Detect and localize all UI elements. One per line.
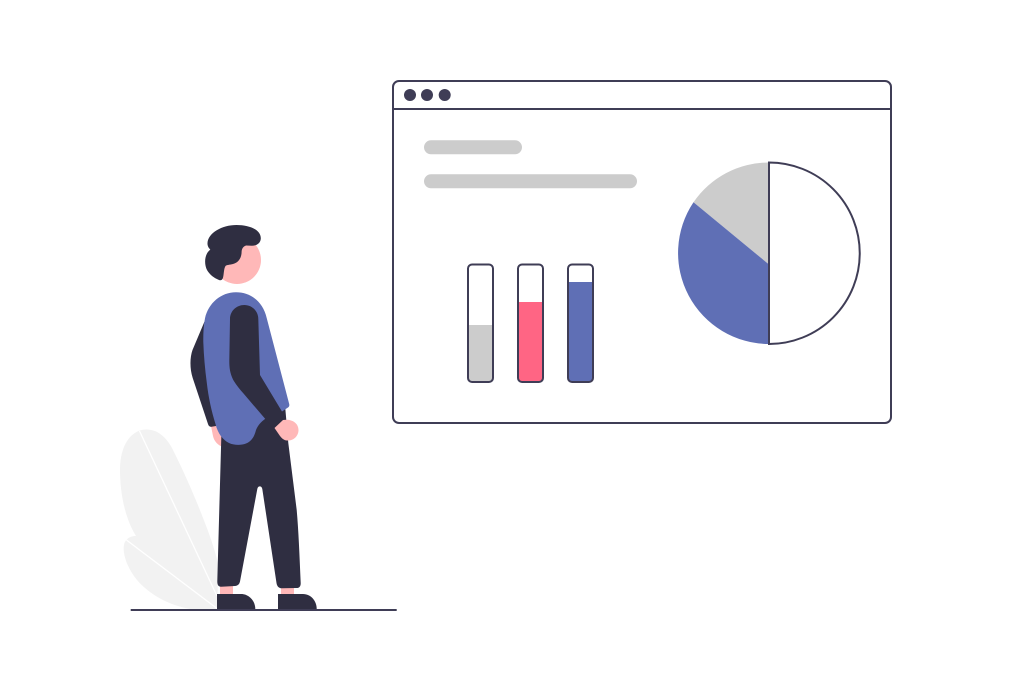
blue bar [568,264,593,382]
left foot skin [220,584,233,596]
title bar divider [393,108,891,110]
gray slice [694,162,769,264]
bar chart [468,264,593,382]
gray bar [468,264,493,382]
blue slice [678,202,769,344]
back arm [190,318,225,427]
ground line [131,609,397,611]
icon: plant leaves [120,430,218,609]
left shoe [217,594,255,609]
white half with outline [769,162,860,344]
pie chart [678,162,860,344]
panel: browser window [393,81,891,423]
pink bar [518,264,543,382]
trousers [217,405,301,588]
right foot skin [281,584,294,596]
right hand [274,420,298,441]
window control dots [404,89,451,101]
front arm [229,305,285,428]
person [190,225,317,609]
left hand [211,426,226,447]
text placeholder bar [424,174,637,188]
right shoe [278,594,317,609]
head [213,236,261,284]
hair [205,225,261,280]
heading placeholder bar [424,140,522,154]
vest [203,292,289,445]
